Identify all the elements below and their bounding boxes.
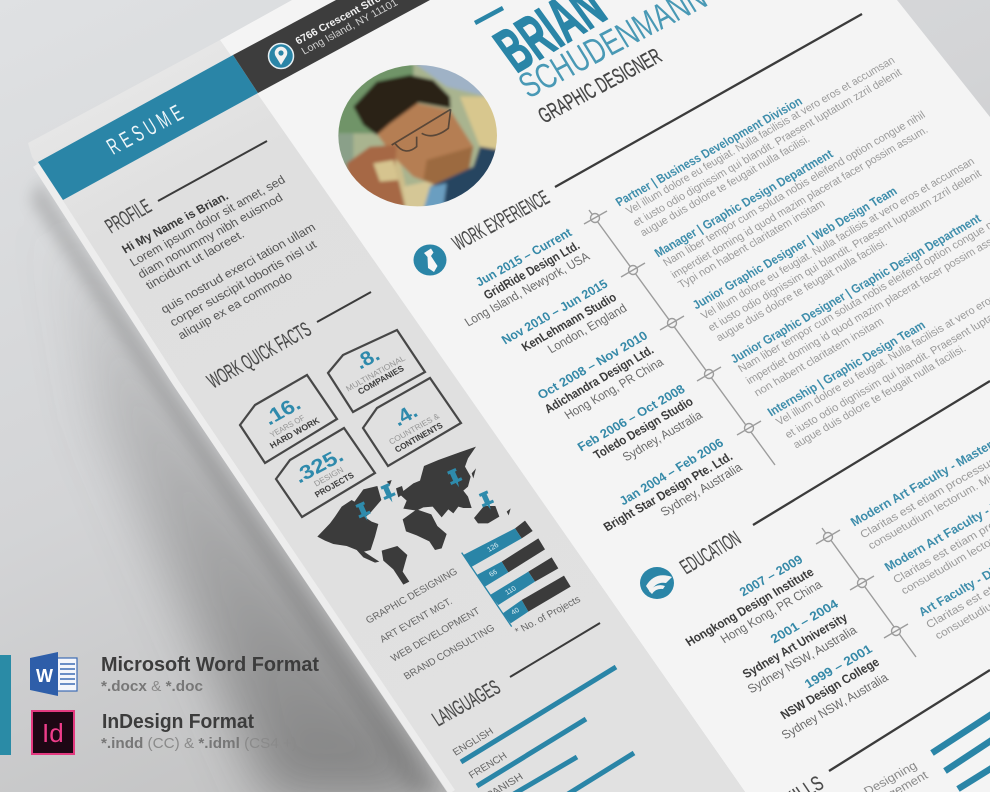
- education dates: university: Sydney Art University: [740, 611, 850, 681]
- work dates: job 1: Jun 2015 – Current: [473, 225, 575, 289]
- chart labels: BRAND CONSULTING: [402, 623, 497, 682]
- work description: junior web: Vel illum dolore eu feugiat. Nulla facilisis at vero eros et accumsan: [699, 156, 977, 322]
- education dates: institute: Hong Kong, PR China: [718, 578, 825, 646]
- chart labels: WEB DEVELOPMENT: [389, 606, 482, 664]
- skills bars: [932, 712, 990, 789]
- chart labels: [364, 566, 583, 682]
- icon: indesign: Id: [42, 718, 64, 748]
- profile text: corper suscipit lobortis nisl ut: [167, 237, 320, 329]
- education dates: university: 2001 – 2004: [768, 597, 841, 646]
- work dates: job 5: Bright Star Design Pte. Ltd.: [601, 450, 735, 534]
- work description: manager: Typi non habent claritatem insitam: [676, 198, 827, 291]
- work dates: job 3: Oct 2008 – Nov 2010: [535, 329, 650, 402]
- chart labels: GRAPHIC DESIGNING: [364, 566, 460, 626]
- icon: indesign: [32, 711, 74, 754]
- fact box: 8 companies: [328, 330, 425, 412]
- fact box: 16 years: YEARS OF: [268, 413, 307, 439]
- fact box: 325 projects: PROJECTS: [313, 470, 356, 499]
- fact box: 325 projects: [276, 428, 375, 517]
- format accent bar: [0, 655, 11, 755]
- profile photo: [338, 65, 497, 206]
- chart labels: ART EVENT MGT.: [378, 596, 455, 645]
- work dates: job 3: Adichandra Design Ltd.: [542, 343, 656, 416]
- work dates: job 4: Toledo Design Studio: [591, 394, 696, 462]
- languages labels: FRENCH: [467, 751, 509, 781]
- fact box: 8 companies: MULTINATIONAL: [344, 354, 407, 393]
- fact box: 4 continents: COUNTRIES &: [387, 411, 442, 446]
- profile text: Hi My Name is Brian.: [119, 189, 231, 256]
- project bar chart: [364, 521, 583, 682]
- work description: partner: augue duis dolore te feugait nulla facilisi.: [638, 133, 812, 239]
- languages labels: ENGLISH: [451, 726, 496, 758]
- profile text: quis nostrud exerci tation ullam: [158, 220, 318, 316]
- work timeline: [584, 210, 775, 465]
- pin: east asia: [446, 467, 465, 490]
- work dates: job 4: Sydney, Australia: [620, 408, 705, 464]
- work description: internship: Internship | Graphic Design Team: [765, 318, 928, 419]
- work description: partner: et iusto odio dignissim qui blandit. Praesent luptatum zzril delenit: [631, 67, 904, 229]
- work description: junior web: et iusto odio dignissim qui blandit. Praesent luptatum zzril delenit: [706, 168, 984, 334]
- icon: tie: [414, 244, 446, 276]
- icon: graduation cap: [640, 567, 674, 599]
- education heading: EDUCATION: [676, 527, 745, 579]
- project bar chart: 110: [504, 585, 518, 597]
- icon: word document: W: [36, 666, 53, 686]
- education dates: college: NSW Design College: [778, 655, 882, 722]
- education dates: college: 1999 – 2001: [802, 642, 875, 691]
- work description: partner: Vel illum dolore eu feugiat. Nulla facilisis at vero eros et accumsan: [624, 55, 897, 217]
- profile text: diam nonummy nibh euismod: [135, 190, 285, 281]
- chart labels: * No. of Projects: [513, 594, 583, 637]
- page shadow: [30, 180, 450, 792]
- education dates: university: Sydney NSW, Australia: [745, 623, 859, 696]
- work description: manager: Nam liber tempor cum soluta nobis eleifend option congue nihil: [661, 109, 928, 269]
- work description: junior graphic: non habent claritatem insitam: [752, 316, 886, 399]
- profile text: Lorem ipsum dolor sit amet, sed: [127, 173, 288, 269]
- fact box: 8 companies: .8.: [351, 344, 384, 374]
- fact box: 16 years: [240, 375, 337, 463]
- project bar chart: 126: [486, 542, 500, 554]
- work description: junior web: augue duis dolore te feugait nulla facilisi.: [714, 237, 890, 344]
- work description: internship: augue duis dolore te feugait nulla facilisi.: [791, 343, 968, 451]
- work dates: job 5: Jan 2004 – Feb 2006: [617, 436, 726, 508]
- education dates: institute: Hongkong Design Institute: [683, 565, 816, 649]
- name heading: [475, 0, 714, 128]
- pin: north america: [354, 501, 373, 523]
- languages heading: LANGUAGES: [428, 676, 505, 731]
- format: word: [101, 654, 319, 695]
- format: indesign: [101, 711, 297, 752]
- address bar: [233, 0, 430, 93]
- education dates: college: Sydney NSW, Australia: [779, 671, 891, 742]
- fact box: 4 continents: .4.: [389, 401, 422, 431]
- work description: manager: imperdiet doming id quod mazim placerat facer possim assum.: [669, 124, 930, 281]
- icon: word document: [30, 652, 77, 696]
- fact box: 325 projects: DESIGN: [312, 465, 345, 488]
- fact box: 325 projects: .325.: [290, 445, 348, 488]
- work dates: job 2: KenLehmann Studio: [519, 290, 619, 354]
- profile text: aliquip ex ea commodo: [175, 268, 295, 342]
- work description: junior web: Junior Graphic Designer | Web Design Team: [690, 184, 900, 312]
- work dates: job 3: Hong Kong, PR China: [562, 355, 666, 422]
- profile heading: PROFILE: [101, 195, 156, 238]
- format: indesign: InDesign Format: [102, 711, 254, 733]
- work dates: job 4: Feb 2006 – Oct 2008: [575, 382, 688, 454]
- fact box: 4 continents: [363, 378, 461, 466]
- profile text: tincidunt ut laoreet.: [143, 227, 247, 292]
- project bar chart: 66: [488, 569, 499, 579]
- profile text: [119, 173, 320, 342]
- pin: europe: [379, 482, 398, 505]
- world map with pins: [317, 447, 511, 585]
- resume main panel: [220, 0, 990, 792]
- fact box: 4 continents: CONTINENTS: [393, 420, 445, 454]
- format: indesign: *.indd (CC) & *.idml (CS4 +): [101, 735, 297, 752]
- format: word: *.docx & *.doc: [101, 678, 203, 695]
- work dates: job 5: Sydney, Australia: [658, 460, 745, 519]
- fact box: 8 companies: COMPANIES: [356, 363, 406, 396]
- work dates: job 1: Long Island, Newyork, USA: [462, 249, 593, 329]
- icon: location pin: [268, 44, 294, 68]
- pin: oceania: [477, 490, 496, 512]
- fact box: 16 years: HARD WORK: [268, 415, 322, 450]
- languages bars: [461, 667, 634, 792]
- resume banner: RESUME: [103, 101, 188, 160]
- resume sidebar panel: [28, 40, 745, 792]
- name heading: GRAPHIC DESIGNER: [533, 43, 666, 128]
- work quick facts heading: WORK QUICK FACTS: [203, 318, 316, 393]
- project bar chart: 40: [510, 607, 521, 617]
- education dates: institute: 2007 – 2009: [737, 553, 805, 599]
- work description: partner: Partner | Business Development Division: [613, 94, 805, 209]
- work dates: job 2: London, England: [545, 301, 629, 356]
- fact box: 16 years: .16.: [260, 393, 305, 430]
- education timeline: [816, 528, 916, 657]
- format: word: Microsoft Word Format: [101, 654, 319, 676]
- languages labels: [451, 726, 525, 792]
- paper stack edge: [36, 165, 452, 792]
- work dates: job 1: GridRide Design Ltd.: [481, 239, 582, 302]
- work experience heading: WORK EXPERIENCE: [449, 186, 554, 255]
- resume banner: [38, 55, 258, 200]
- work dates: job 2: Nov 2010 – Jun 2015: [499, 277, 610, 347]
- skills list: [857, 758, 931, 792]
- work description: manager: Manager | Graphic Design Department: [652, 147, 836, 260]
